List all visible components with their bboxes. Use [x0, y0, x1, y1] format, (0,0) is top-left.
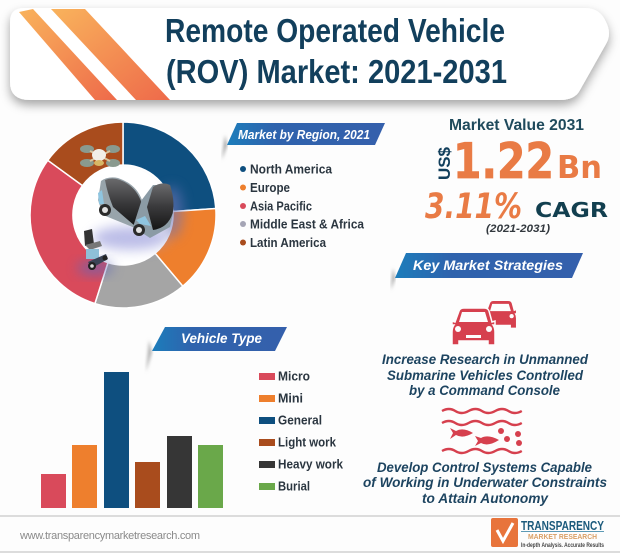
bar: Micro	[41, 474, 66, 508]
bar: Heavy work	[167, 436, 192, 508]
strategy text 1: Increase Research in Unmanned	[382, 352, 589, 367]
ribbon: Key Market Strategies: Key Market Strategies	[413, 257, 563, 273]
icon: waves and fish	[442, 409, 522, 453]
title text: (ROV) Market: 2021-2031	[166, 53, 507, 90]
logo mark	[491, 518, 518, 547]
front car	[452, 308, 495, 345]
bar chart: vehicle type	[41, 372, 223, 508]
logo: Transparency Market Research	[491, 518, 604, 549]
heading: Market Value 2031: Market Value 2031	[449, 117, 584, 134]
strategy text 2	[363, 460, 607, 506]
legend item: Burial: Burial	[278, 480, 310, 494]
strategy text 2: of Working in Underwater Constraints	[363, 475, 607, 490]
strategy text 1: Submarine Vehicles Controlled	[387, 368, 584, 383]
period: (2021-2031)	[486, 223, 550, 235]
segment: Asia Pacific	[30, 160, 108, 304]
icon: ROV left pod	[98, 177, 142, 228]
legend item: Heavy work: Heavy work	[278, 458, 343, 472]
unit: US$: US$	[435, 146, 454, 180]
logo text	[521, 518, 604, 549]
legend item: Europe: Europe	[250, 181, 290, 195]
strategy text 2: to Attain Autonomy	[422, 491, 550, 506]
value: 1.22: 1.22	[453, 133, 554, 190]
legend item: Middle East and Africa: Middle East & Africa	[250, 218, 365, 232]
title banner	[10, 8, 609, 100]
market value callout	[425, 117, 608, 235]
legend item: Latin America: Latin America	[250, 236, 327, 250]
strategy text 1: by a Command Console	[409, 383, 560, 398]
center image: vehicles	[73, 167, 183, 275]
legend item: Mini: Mini	[278, 392, 303, 406]
legend item: North America: North America	[250, 162, 333, 176]
donut chart: market by region	[30, 122, 216, 308]
bar: General	[104, 372, 129, 508]
unit: Bn: Bn	[557, 150, 602, 186]
legend item: Asia Pacific: Asia Pacific	[250, 200, 312, 214]
icon: small control console	[84, 229, 108, 270]
strategy text 1	[382, 352, 589, 398]
icon: cars	[452, 301, 516, 345]
bar: Burial	[198, 445, 223, 508]
ribbon: Key Market Strategies	[391, 253, 583, 290]
footer url: www.transparencymarketresearch.com	[19, 530, 200, 542]
legend item: General: General	[278, 414, 322, 428]
bar: Light work	[135, 462, 160, 508]
ribbon: Market by Region	[222, 123, 385, 160]
legend item: Light work: Light work	[278, 436, 336, 450]
title text: Remote Operated Vehicle	[165, 12, 505, 49]
ribbon: Vehicle Type: Vehicle Type	[181, 330, 262, 346]
logo text: MARKET RESEARCH	[528, 532, 597, 541]
ribbon: Market by Region: Market by Region, 2021	[238, 127, 370, 142]
legend item: Micro: Micro	[278, 370, 310, 384]
bar: Mini	[72, 445, 97, 508]
title text	[165, 12, 507, 90]
segment: North America	[123, 122, 216, 212]
label: CAGR: CAGR	[535, 198, 608, 222]
segment: Latin America	[48, 122, 123, 186]
strategy text 2: Develop Control Systems Capable	[377, 460, 592, 475]
segment: Europe	[155, 208, 216, 286]
icon: ROV right pod	[133, 183, 173, 238]
icon: drone	[80, 145, 120, 167]
legend: vehicle type	[259, 370, 343, 494]
rear car	[485, 301, 516, 328]
legend: regions	[240, 162, 365, 250]
banner orange stripes	[19, 9, 170, 100]
value: 3.11%: 3.11%	[425, 187, 522, 227]
segment: Middle East and Africa	[95, 253, 183, 308]
ribbon: Vehicle Type	[146, 327, 287, 372]
